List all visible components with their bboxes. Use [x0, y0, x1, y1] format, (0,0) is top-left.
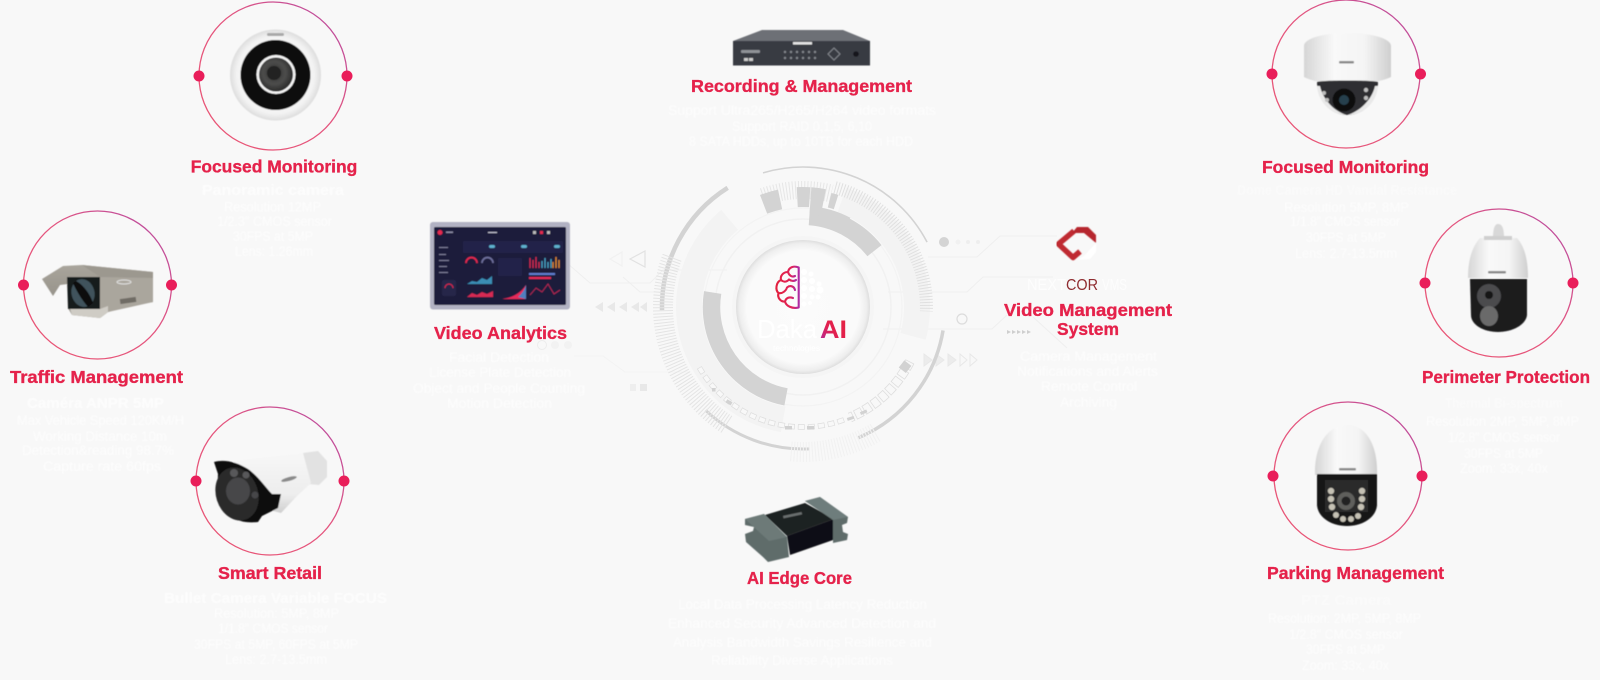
heading: Video Management: [1004, 300, 1172, 320]
specs: 30FPS at 5MP: [1306, 230, 1386, 245]
panel: video management system: [1004, 227, 1172, 410]
specs: Dome Camera HD Vandal Resistance: [1237, 182, 1457, 199]
specs: 1/2.3" CMOS sensor: [217, 214, 332, 229]
icon: brain: [776, 267, 824, 308]
specs: Support RAID 0,1,5, 6,10: [732, 119, 872, 134]
specs: [1237, 182, 1457, 261]
specs: Lens: 2.7-13.5mm: [225, 652, 327, 667]
right dots: [939, 237, 980, 247]
specs: Motion Detection: [447, 396, 552, 411]
icon: network video recorder: [733, 30, 870, 66]
left triangle markers: [610, 251, 645, 267]
specs: Support Ultra265/H265/H264 video formats: [668, 103, 936, 118]
icon: analytics dashboard: [430, 222, 570, 310]
icon: dome camera: [1304, 33, 1391, 115]
specs: [202, 182, 345, 259]
specs: 30FPS at 5MP: [233, 229, 313, 244]
lower right arrows: [924, 354, 977, 366]
specs: [164, 590, 387, 667]
specs: Reliability Diverse Applications: [711, 653, 893, 668]
specs: [1426, 395, 1579, 476]
filled squares: [712, 360, 911, 430]
ring: [190, 407, 350, 555]
panel: parking management: [1267, 402, 1444, 673]
heading: Recording & Management: [691, 76, 912, 96]
specs: Facial Detection: [449, 350, 549, 365]
specs: Archiving: [1060, 395, 1117, 410]
specs: 8 SATA HDDs, up to 10TB for each HDD: [689, 134, 913, 149]
ring: [194, 2, 352, 150]
specs: PTZ Camera: [1301, 592, 1392, 609]
panel: recording and management: [668, 30, 936, 149]
logo text: COR: [1066, 277, 1098, 294]
heading: Video Analytics: [434, 323, 567, 343]
logo: Daka AI: AI: [820, 316, 847, 344]
specs: Analysis Bandwidth Savings Resilience and: [673, 635, 932, 650]
circuit lines: [567, 236, 1067, 372]
icon: fisheye camera: [230, 30, 321, 120]
logo: Daka AI: Daka: [757, 314, 818, 344]
heading: Focused Monitoring: [1262, 157, 1429, 177]
center disc: [732, 236, 874, 378]
specs: Capture rate 60fps: [43, 459, 161, 474]
specs: Notifications and Alerts: [1017, 364, 1158, 379]
specs: 1/2.8" CMOS sensor: [1448, 430, 1560, 445]
specs: Camera Management: [1020, 349, 1157, 364]
heading: AI Edge Core: [747, 568, 852, 588]
specs: Resolution: 5MP, 8MP: [214, 606, 339, 621]
specs: Zoom: 33x, 40x: [1460, 461, 1548, 476]
icon: traffic camera: [42, 265, 153, 318]
panel: dome focused monitoring: [1237, 0, 1457, 261]
specs: [1268, 592, 1421, 673]
panel: smart retail: [164, 407, 387, 667]
specs: Detection&reading 98.7%: [22, 443, 174, 458]
specs: 1/2.8" CMOS sensor: [1289, 627, 1403, 642]
heading: Smart Retail: [218, 563, 322, 583]
specs: Lens: 2.7-13.5mm: [1295, 246, 1397, 261]
specs: [1017, 349, 1158, 410]
specs: Resolution: 2MP, 5MP, 8MP: [1268, 611, 1421, 626]
icon: edge device: [745, 497, 848, 562]
specs: Bullet Camera Variable FOCUS: [164, 590, 387, 607]
ring: [1266, 0, 1426, 148]
specs: 1/1.8" CMOS sensor: [218, 621, 328, 636]
specs: Zoom: 33x, 40x: [1302, 658, 1389, 673]
central circuit graphic: [538, 133, 1067, 481]
faint squares: [630, 384, 647, 391]
heading: Perimeter Protection: [1422, 367, 1590, 387]
ring: [1420, 209, 1578, 357]
dark segments: [661, 165, 945, 449]
heading: System: [1057, 319, 1119, 339]
specs: Caméra ANPR 5MP: [27, 395, 164, 412]
specs: [17, 395, 184, 474]
logo: Daka AI: technologies: [773, 344, 820, 353]
logo text: VMS: [1102, 277, 1127, 294]
specs: Resolution 5MP, 8MP: [1284, 200, 1409, 215]
specs: 30FPS at 5MP, 60FPS at 5MP: [194, 637, 358, 652]
specs: Local Data Processing Latency Reduction: [678, 597, 927, 612]
specs: Max Vehicle Speed 120KM/H: [17, 413, 184, 428]
icon: thermal ptz camera: [1468, 224, 1528, 332]
logo text: NEXT: [1027, 277, 1066, 294]
ring: [1268, 402, 1428, 550]
right small arrows: [1007, 330, 1031, 334]
heading: Parking Management: [1267, 563, 1444, 583]
specs: License Plate Detection: [429, 365, 571, 380]
heading: Traffic Management: [10, 367, 183, 387]
specs: Object and People Counting: [413, 381, 585, 396]
logo text: [1027, 277, 1127, 294]
heading: Focused Monitoring: [191, 157, 357, 177]
specs: [668, 597, 936, 668]
right hollow node: [957, 314, 967, 324]
faint dots by video analytics: [538, 340, 572, 350]
heading: [1004, 300, 1172, 339]
specs: Working Distance 10m: [33, 429, 167, 444]
panel: panoramic focused monitoring: [191, 2, 357, 259]
panel: video analytics: [413, 222, 585, 411]
specs: 30FPS at 5MP: [1464, 446, 1543, 461]
panel: perimeter protection: [1420, 209, 1590, 476]
specs: Resolution 12MP: [224, 200, 321, 214]
specs: [668, 103, 936, 149]
icon: ptz camera with leds: [1315, 425, 1377, 526]
specs: 1/1.8" CMOS sensor: [1290, 214, 1400, 229]
light bands: [657, 161, 949, 453]
icon: nextcor logo: [1058, 227, 1096, 260]
outer arcs: [629, 133, 977, 481]
logo: Daka AI: [757, 314, 847, 353]
specs: [413, 350, 585, 411]
specs: Remote Control: [1041, 379, 1137, 394]
ring: [18, 211, 177, 359]
specs: Panoramic camera: [202, 182, 345, 199]
specs: Lens: 1.26mm: [235, 244, 313, 259]
specs: Thermal Bi-spectrum: [1445, 395, 1563, 412]
square segment ring: [699, 362, 910, 427]
specs: Enhanced Security Advanced Detection and: [668, 616, 936, 631]
panel: ai edge core: [668, 497, 936, 668]
specs: Resolution 2MP, 5MP, 8MP: [1426, 414, 1579, 429]
icon: bullet camera: [209, 451, 327, 526]
panel: traffic management: [10, 211, 184, 474]
left arrow row: [595, 302, 647, 312]
tick rings: [663, 188, 926, 452]
specs: 30FPS at 5MP: [1306, 642, 1385, 657]
